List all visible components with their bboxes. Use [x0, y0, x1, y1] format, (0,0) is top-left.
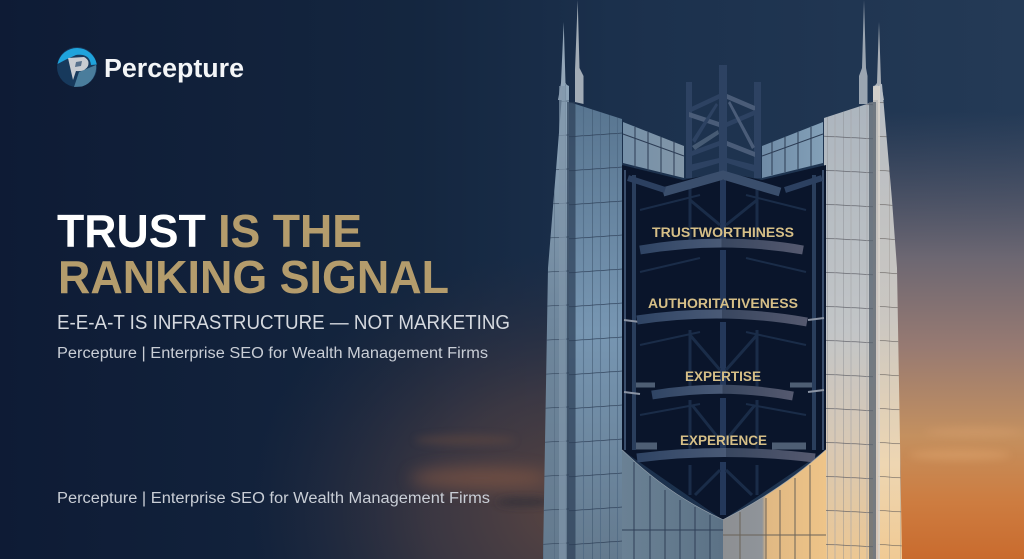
spires: right	[859, 0, 884, 104]
title: TRUST IS THE	[57, 205, 362, 257]
left wing glass	[623, 122, 684, 178]
wordmark: Percepture	[104, 55, 244, 83]
right main face	[824, 102, 876, 559]
lower right glass	[723, 450, 826, 559]
pillar label: experience: EXPERIENCE	[680, 433, 767, 448]
interior steel structure	[624, 170, 824, 515]
title: RANKING SIGNAL	[58, 251, 449, 303]
open core interior	[622, 165, 826, 520]
spires: left	[558, 0, 584, 104]
left main face	[567, 102, 622, 559]
building tower	[543, 0, 902, 559]
lower glass edge	[622, 450, 826, 520]
right wing glass	[762, 122, 823, 178]
logo	[57, 47, 244, 87]
steel floor beams	[628, 175, 822, 458]
subtitle: E-E-A-T IS INFRASTRUCTURE — NOT MARKETING	[57, 312, 510, 334]
right blade	[873, 84, 902, 559]
pillar label: trustworthiness: TRUSTWORTHINESS	[652, 225, 794, 240]
lower left glass	[622, 450, 723, 559]
pillar label: expertise: EXPERTISE	[685, 369, 761, 384]
title	[57, 205, 449, 303]
steel truss crown	[686, 65, 761, 180]
footer tagline: Percepture | Enterprise SEO for Wealth Management Firms	[57, 490, 490, 507]
pillar label: authoritativeness: AUTHORITATIVENESS	[648, 296, 798, 311]
left blade	[543, 83, 569, 559]
icon: percepture mark	[57, 47, 97, 87]
tagline: Percepture | Enterprise SEO for Wealth Management Firms	[57, 345, 488, 362]
